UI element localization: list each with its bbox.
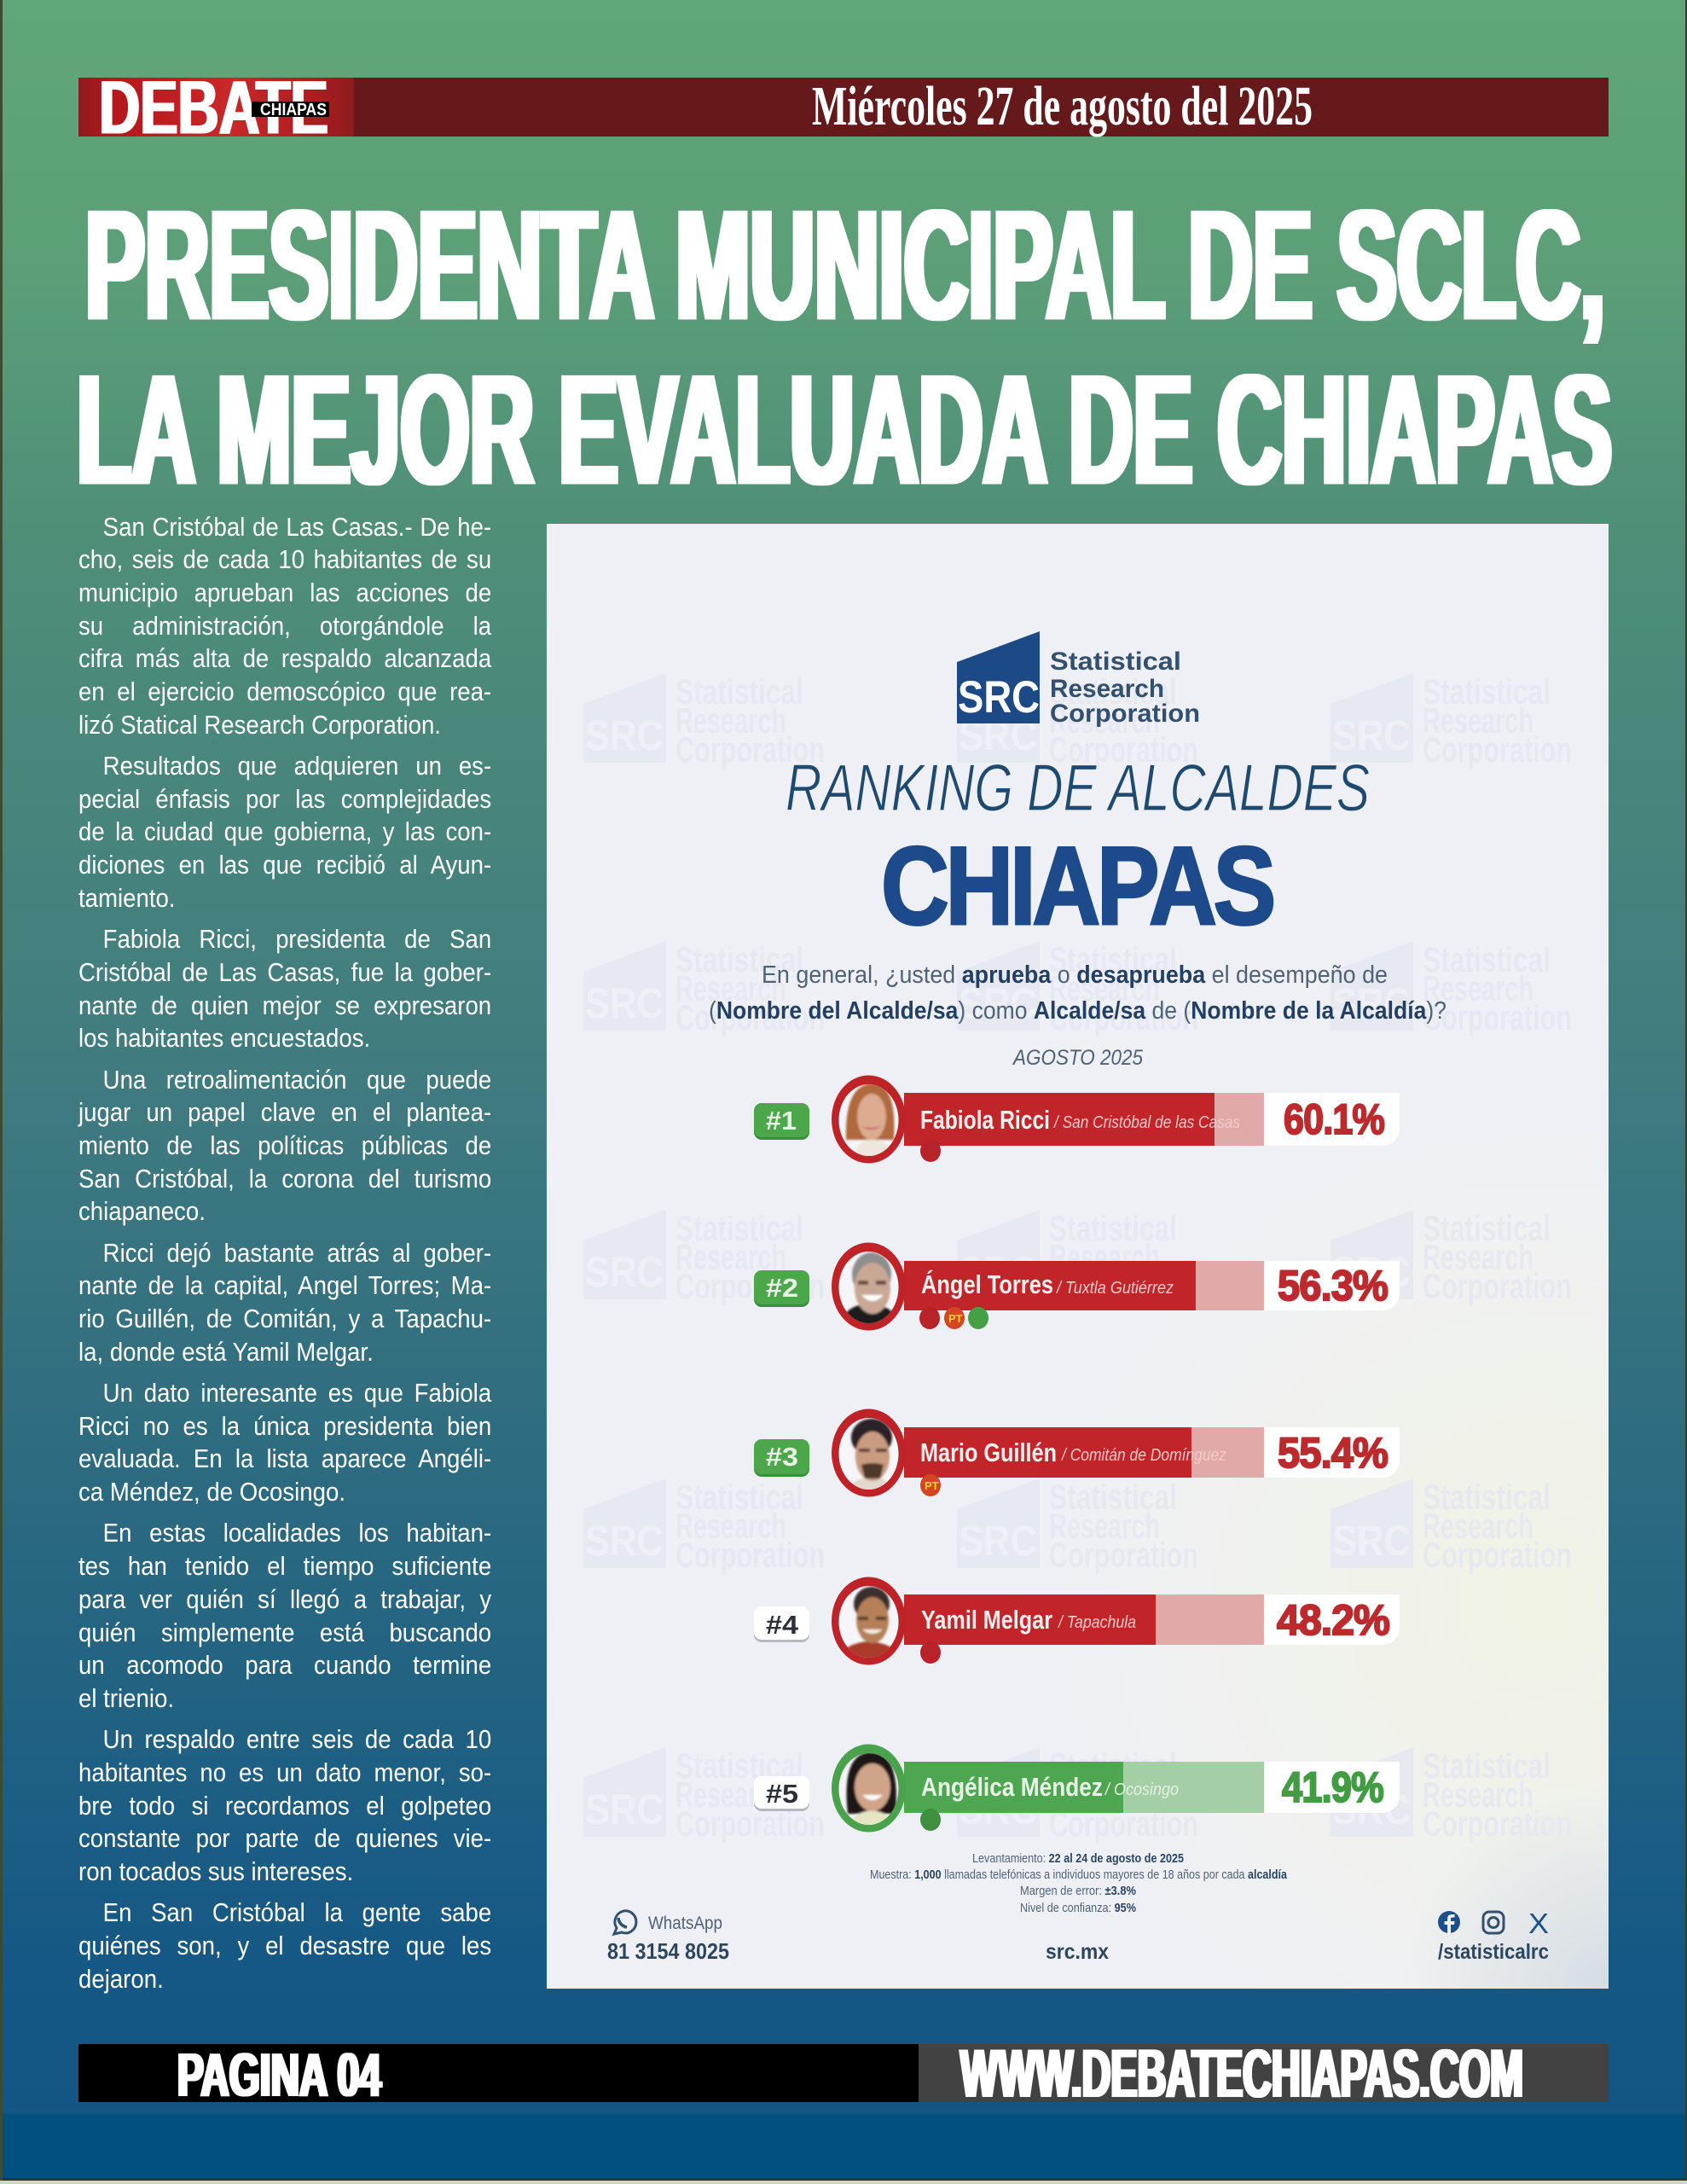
row 3: Mario Guillén: PT: [925, 1479, 939, 1492]
survey methodology: Muestra: 1,000 llamadas telefónicas a individuos mayores de 18 años por cada alcaldía: [870, 1867, 1288, 1882]
icon: X: X: [1528, 1908, 1549, 1939]
watermarks: Corporation: [1049, 997, 1198, 1037]
row 2: Ángel Torres: #2: [766, 1273, 798, 1303]
paragraph 9: quiénes son, y el desastre que les: [78, 1931, 491, 1960]
watermarks: SRC: [1332, 712, 1411, 759]
survey question: En general, ¿usted aprueba o desaprueba el desempeño de: [762, 961, 1388, 989]
survey methodology: Nivel de confianza: 95%: [1020, 1901, 1136, 1915]
social handles: [1438, 1908, 1549, 1964]
paragraph 5: [78, 1239, 491, 1367]
row 2: Ángel Torres: Ángel Torres: [921, 1269, 1053, 1299]
SRC logo: [957, 631, 1200, 728]
logo: Debate Chiapas: DEBATE: [99, 65, 328, 150]
paragraph 4: San Cristóbal, la corona del turismo: [78, 1165, 491, 1194]
watermarks: Statistical: [1049, 939, 1177, 979]
watermarks: Statistical: [675, 1208, 803, 1248]
paragraph 5: la, donde está Yamil Melgar.: [78, 1338, 374, 1367]
paragraph 9: dejaron.: [78, 1965, 164, 1994]
watermarks: Research: [675, 1506, 786, 1546]
watermarks: Statistical: [675, 939, 803, 979]
paragraph 1: [78, 512, 491, 740]
paragraph 7: En estas localidades los habitan-: [103, 1519, 491, 1548]
paragraph 1: San Cristóbal de Las Casas.- De he-: [103, 512, 491, 541]
paragraph 1: cho, seis de cada 10 habitantes de su: [78, 545, 491, 574]
paragraph 6: [78, 1379, 491, 1507]
paragraph 7: tes han tenido el tiempo suficiente: [78, 1552, 491, 1581]
paragraph 9: [78, 1898, 491, 1994]
row 5: Angélica Méndez: 41.9%: [1282, 1763, 1383, 1811]
SRC logo: Statistical: [1050, 648, 1181, 676]
SRC logo: Research: [1050, 675, 1164, 703]
watermarks: Research: [675, 1774, 786, 1815]
row 2: Ángel Torres: / Tuxtla Gutiérrez: [1055, 1279, 1174, 1298]
watermarks: Corporation: [675, 1535, 825, 1575]
watermarks: Corporation: [675, 729, 825, 770]
watermarks: Corporation: [1423, 997, 1572, 1037]
icon: WhatsApp: [614, 1911, 636, 1934]
watermarks: Research: [675, 700, 786, 741]
survey date: AGOSTO 2025: [1012, 1046, 1143, 1070]
paragraph 3: Cristóbal de Las Casas, fue la gober-: [78, 958, 491, 987]
logo: Debate Chiapas: CHIAPAS: [260, 101, 327, 119]
paragraph 7: el trienio.: [78, 1684, 174, 1713]
row 3: Mario Guillén: / Comitán de Domínguez: [1060, 1446, 1226, 1465]
paragraph 7: para ver quién sí llegó a trabajar, y: [78, 1585, 491, 1614]
paragraph 4: chiapaneco.: [78, 1197, 206, 1226]
row 3: Mario Guillén: [754, 1409, 1400, 1496]
survey methodology: Margen de error: ±3.8%: [1020, 1884, 1136, 1898]
watermarks: Statistical: [1423, 1745, 1551, 1786]
SRC logo: Corporation: [1050, 700, 1200, 728]
paragraph 2: [78, 752, 491, 913]
paragraph 2: diciones en las que recibió al Ayun-: [78, 851, 491, 880]
paragraph 6: Un dato interesante es que Fabiola: [103, 1379, 491, 1408]
paragraph 8: bre todo si recordamos el golpeteo: [78, 1792, 491, 1821]
icon: Facebook: [1438, 1911, 1460, 1933]
watermarks: SRC: [959, 979, 1037, 1027]
social handles: /statisticalrc: [1438, 1940, 1549, 1964]
survey methodology: [870, 1851, 1288, 1915]
paragraph 1: cifra más alta de respaldo alcanzada: [78, 644, 491, 673]
watermarks: Statistical: [1423, 1477, 1551, 1517]
watermarks: Research: [1423, 968, 1533, 1008]
watermarks: Statistical: [1049, 1745, 1177, 1786]
paragraph 6: evaluada. En la lista aparece Angéli-: [78, 1444, 491, 1473]
watermarks: SRC: [1332, 1786, 1411, 1833]
watermarks: Statistical: [1423, 671, 1551, 712]
watermarks: SRC: [959, 1248, 1037, 1296]
row 5: Angélica Méndez: / Ocosingo: [1104, 1780, 1179, 1799]
website: src.mx: [1046, 1940, 1109, 1964]
contact: WhatsApp: WhatsApp: [648, 1914, 722, 1933]
paragraph 7: [78, 1519, 491, 1713]
row 1: Fabiola Ricci: Fabiola Ricci: [920, 1105, 1050, 1135]
watermarks: Statistical: [1049, 1208, 1177, 1248]
watermarks: Research: [1423, 1237, 1533, 1277]
watermarks: Corporation: [1423, 1266, 1572, 1306]
watermarks: Corporation: [1423, 729, 1572, 770]
watermarks: Statistical: [675, 671, 803, 712]
row 3: Mario Guillén: 55.4%: [1278, 1429, 1388, 1477]
paragraph 1: su administración, otorgándole la: [78, 612, 491, 641]
watermarks: Research: [1049, 700, 1160, 741]
row 5: Angélica Méndez: Angélica Méndez: [921, 1772, 1103, 1802]
paragraph 1: lizó Statical Research Corporation.: [78, 711, 441, 740]
paragraph 8: constante por parte de quienes vie-: [78, 1824, 491, 1853]
paragraph 1: municipio aprueban las acciones de: [78, 578, 491, 607]
watermarks: Statistical: [1049, 1477, 1177, 1517]
paragraph 8: ron tocados sus intereses.: [78, 1857, 353, 1886]
paragraph 2: pecial énfasis por las complejidades: [78, 785, 491, 814]
watermarks: Research: [1049, 1237, 1160, 1277]
row 5: Angélica Méndez: #5: [766, 1779, 798, 1809]
watermarks: Research: [1423, 1774, 1533, 1815]
survey methodology: Levantamiento: 22 al 24 de agosto de 2025: [972, 1851, 1184, 1866]
paragraph 8: Un respaldo entre seis de cada 10: [103, 1725, 491, 1754]
watermarks: SRC: [585, 712, 664, 759]
row 3: Mario Guillén: #3: [766, 1442, 798, 1472]
paragraph 4: Una retroalimentación que puede: [103, 1066, 491, 1095]
row 5: Angélica Méndez: [754, 1744, 1400, 1833]
watermarks: Research: [675, 1237, 786, 1277]
heading: Chiapas: CHIAPAS: [881, 823, 1272, 948]
paragraph 6: ca Méndez, de Ocosingo.: [78, 1478, 345, 1507]
watermarks: Corporation: [1049, 729, 1198, 770]
row 2: Ángel Torres: PT: [948, 1312, 963, 1325]
watermarks: Corporation: [1049, 1266, 1198, 1306]
row 3: Mario Guillén: Mario Guillén: [920, 1438, 1057, 1467]
paragraph 6: Ricci no es la única presidenta bien: [78, 1412, 491, 1441]
watermarks: Statistical: [675, 1745, 803, 1786]
paragraph 7: quién simplemente está buscando: [78, 1618, 491, 1647]
paragraph 8: [78, 1725, 491, 1886]
row 4: Yamil Melgar: / Tapachula: [1057, 1613, 1136, 1632]
paragraph 4: jugar un papel clave en el plantea-: [78, 1098, 491, 1127]
row 4: Yamil Melgar: #4: [766, 1610, 799, 1640]
watermarks: Corporation: [1423, 1804, 1572, 1844]
paragraph 1: en el ejercicio demoscópico que rea-: [78, 677, 491, 706]
watermarks: Statistical: [1423, 1208, 1551, 1248]
row 4: Yamil Melgar: [754, 1577, 1400, 1665]
watermarks: Corporation: [675, 1804, 825, 1844]
watermarks: SRC: [959, 1786, 1037, 1833]
watermarks: Statistical: [675, 1477, 803, 1517]
paragraph 2: de la ciudad que gobierna, y las con-: [78, 817, 491, 846]
survey question: [709, 961, 1446, 1025]
paragraph 5: nante de la capital, Angel Torres; Ma-: [78, 1271, 491, 1300]
watermarks: Statistical: [1423, 939, 1551, 979]
watermarks: Research: [1049, 1774, 1160, 1815]
SRC logo: SRC: [958, 672, 1040, 723]
paragraph 3: Fabiola Ricci, presidenta de San: [103, 925, 491, 954]
watermarks: SRC: [585, 1517, 664, 1565]
paragraph 2: Resultados que adquieren un es-: [103, 752, 491, 781]
paragraph 3: nante de quien mejor se expresaron: [78, 991, 491, 1020]
row 4: Yamil Melgar: 48.2%: [1277, 1596, 1390, 1644]
heading: ranking de alcaldes: RANKING DE ALCALDES: [786, 750, 1370, 825]
panel: ranking de alcaldes: [547, 524, 1609, 1989]
watermarks: SRC: [585, 1248, 664, 1296]
contact: WhatsApp: [607, 1911, 729, 1964]
page number: PAGINA 04: [177, 2042, 381, 2110]
header bar: [78, 65, 1609, 150]
row 4: Yamil Melgar: Yamil Melgar: [921, 1605, 1052, 1635]
watermarks: [583, 671, 1572, 1844]
date: Miércoles 27 de agosto del 2025: [812, 75, 1313, 137]
watermarks: SRC: [959, 1517, 1037, 1565]
watermarks: SRC: [1332, 979, 1411, 1027]
watermarks: SRC: [1332, 1248, 1411, 1296]
watermarks: Research: [1049, 968, 1160, 1008]
watermarks: Statistical: [1049, 671, 1177, 712]
paragraph 8: habitantes no es un dato menor, so-: [78, 1758, 491, 1787]
watermarks: Corporation: [1049, 1804, 1198, 1844]
row 1: Fabiola Ricci: / San Cristóbal de las Casas: [1052, 1113, 1240, 1132]
watermarks: Research: [675, 968, 786, 1008]
survey question: (Nombre del Alcalde/sa) como Alcalde/sa de (Nombre de la Alcaldía)?: [709, 997, 1446, 1025]
paragraph 5: rio Guillén, de Comitán, y a Tapachu-: [78, 1304, 491, 1333]
paragraph 3: [78, 925, 491, 1053]
watermarks: Corporation: [675, 997, 825, 1037]
row 2: Ángel Torres: [754, 1242, 1400, 1331]
row 2: Ángel Torres: 56.3%: [1278, 1262, 1388, 1310]
paragraph 4: [78, 1066, 491, 1226]
row 1: Fabiola Ricci: [754, 1075, 1400, 1164]
title: [77, 177, 1612, 517]
footer bar: [78, 2036, 1609, 2112]
contact: WhatsApp: 81 3154 8025: [607, 1938, 729, 1964]
watermarks: Corporation: [1423, 1535, 1572, 1575]
watermarks: SRC: [959, 712, 1037, 759]
watermarks: Research: [1049, 1506, 1160, 1546]
watermarks: SRC: [585, 1786, 664, 1833]
watermarks: Research: [1423, 700, 1533, 741]
watermarks: Research: [1423, 1506, 1533, 1546]
watermarks: SRC: [1332, 1517, 1411, 1565]
paragraph 4: miento de las políticas públicas de: [78, 1131, 491, 1160]
paragraph 7: un acomodo para cuando termine: [78, 1651, 491, 1680]
row 1: Fabiola Ricci: #1: [766, 1106, 797, 1136]
article body text: [78, 512, 491, 1994]
watermarks: Corporation: [675, 1266, 825, 1306]
paragraph 5: Ricci dejó bastante atrás al gober-: [103, 1239, 491, 1268]
watermarks: SRC: [585, 979, 664, 1027]
icon: Instagram: [1483, 1912, 1504, 1933]
watermarks: Corporation: [1049, 1535, 1198, 1575]
paragraph 3: los habitantes encuestados.: [78, 1024, 370, 1053]
paragraph 9: En San Cristóbal la gente sabe: [103, 1898, 491, 1927]
paragraph 2: tamiento.: [78, 884, 176, 913]
row 1: Fabiola Ricci: 60.1%: [1284, 1095, 1384, 1143]
